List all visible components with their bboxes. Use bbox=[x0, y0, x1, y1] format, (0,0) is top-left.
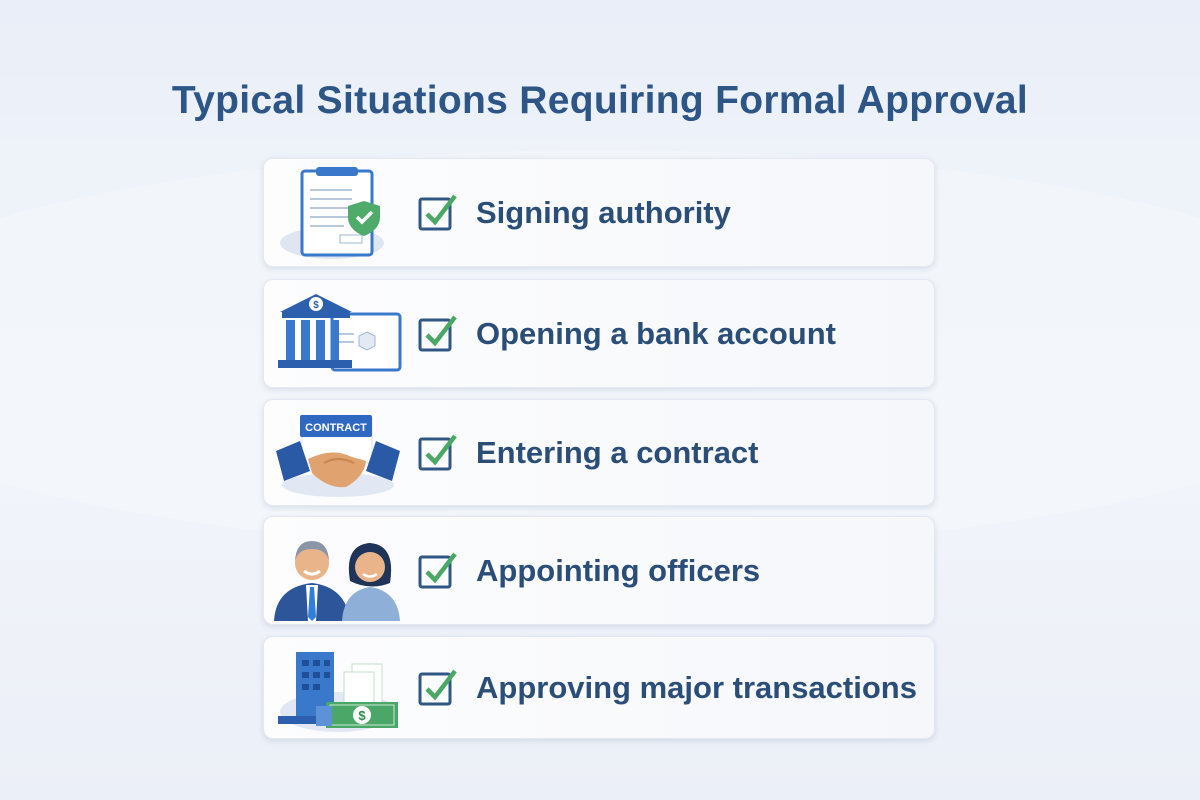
card: officers bbox=[263, 516, 935, 625]
icon: bank building and card: $ bbox=[313, 300, 319, 310]
label: Signing authority bbox=[476, 194, 731, 230]
icon: clipboard with shield bbox=[280, 167, 384, 259]
checkbox bbox=[418, 316, 457, 352]
icon: handshake contract: CONTRACT bbox=[305, 422, 367, 434]
icon: two officers bbox=[274, 541, 400, 621]
card: signing authority bbox=[263, 158, 935, 267]
checkbox bbox=[418, 552, 457, 588]
icon: building and money: $ bbox=[358, 708, 366, 722]
card: bank account bbox=[263, 279, 935, 388]
card: contract bbox=[263, 399, 935, 506]
label: Approving major transactions bbox=[476, 670, 917, 704]
icon: building and money bbox=[278, 652, 398, 732]
icon: handshake contract bbox=[276, 415, 400, 497]
checkbox bbox=[418, 194, 457, 230]
icon: bank building and card bbox=[278, 294, 402, 372]
label: Opening a bank account bbox=[476, 316, 836, 350]
checkbox bbox=[418, 670, 457, 706]
card: transactions bbox=[263, 636, 935, 739]
checkbox bbox=[418, 434, 457, 470]
label: Entering a contract bbox=[476, 434, 758, 470]
title: Typical Situations Requiring Formal Approval bbox=[172, 79, 1028, 122]
label: Appointing officers bbox=[476, 552, 760, 588]
